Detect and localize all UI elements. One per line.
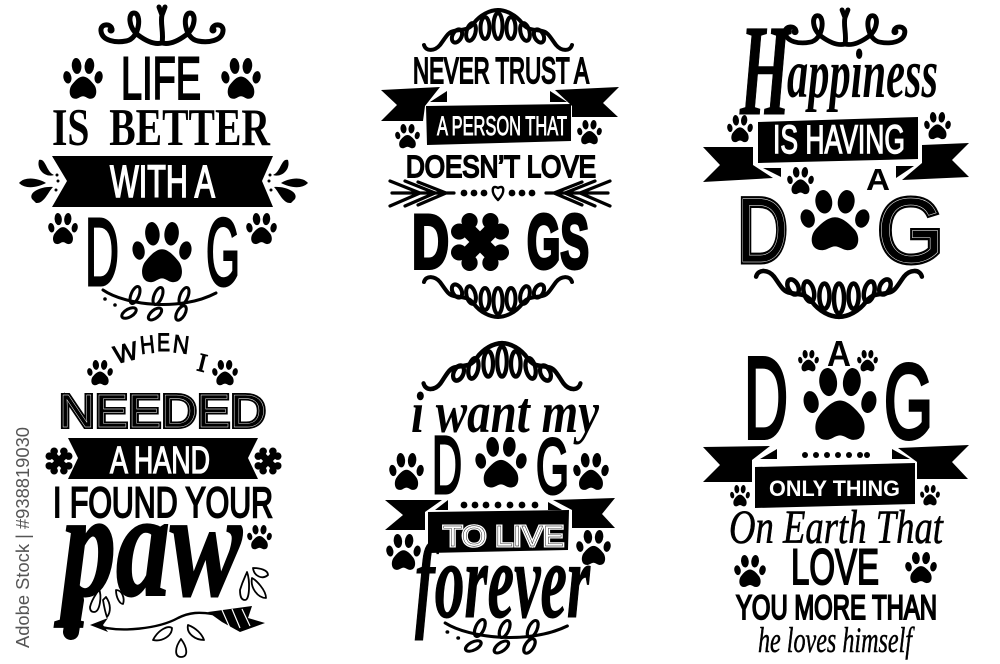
icon: paw left [395, 124, 420, 148]
ornament: bottom flourish [424, 277, 572, 317]
ribbon: left fold [435, 500, 448, 510]
icon: paw lower right [904, 552, 938, 583]
banner: with a [52, 156, 273, 207]
icon: paw left [388, 453, 425, 490]
panel: when i needed a hand [46, 329, 282, 657]
text: D: D [737, 180, 788, 282]
text: TO LIVE: TO LIVE [443, 521, 564, 553]
ribbon: left tail [703, 147, 773, 182]
text: I FOUND YOUR: I FOUND YOUR [53, 479, 273, 527]
banner: a hand [68, 438, 258, 479]
text: IS HAVING: IS HAVING [773, 118, 905, 162]
text: WHEN I [111, 329, 210, 378]
ribbon: left tail [385, 500, 442, 530]
text: G: G [536, 422, 569, 510]
ornament: twig [103, 285, 216, 322]
icon: paw left [62, 58, 104, 99]
text: A PERSON THAT: A PERSON THAT [437, 111, 567, 141]
ribbon: left fold [760, 449, 777, 459]
text: G: G [877, 180, 944, 282]
text: DOESN'T LOVE: DOESN’T LOVE [406, 149, 596, 184]
ornament: bottom flourish [756, 271, 922, 317]
text: A HAND: A HAND [110, 440, 210, 482]
panel: life is better with a dog [19, 7, 308, 322]
arrow: left [390, 181, 454, 206]
icon: paw left [87, 360, 113, 385]
text: G: G [884, 343, 933, 461]
text: TO LIVE: TO LIVE [443, 521, 564, 553]
ribbon: main [755, 463, 915, 508]
ribbon: right tail [555, 87, 619, 117]
ribbon: main [758, 117, 918, 163]
label: adobe stock id: Adobe Stock | #938819030 [13, 427, 33, 648]
text: he loves himself: he loves himself [758, 620, 915, 660]
icon: paw lower left [385, 534, 422, 570]
heading: LIFE: LIFE [121, 45, 201, 112]
text: WHEN I: N [171, 330, 191, 360]
icon: central paw [474, 436, 528, 487]
text: WHEN I: I [195, 348, 210, 378]
heading: paw: paw [54, 462, 243, 628]
ribbon: left fold [763, 168, 781, 177]
ribbon: left fold [430, 91, 447, 102]
text: WITH A: WITH A [110, 156, 215, 207]
text: D: D [412, 200, 449, 285]
ribbon: main [428, 510, 569, 553]
icon: paw right [857, 350, 878, 371]
icon: bone clover right [254, 448, 282, 474]
ornament: top flourish [424, 343, 580, 389]
panel: never trust a person [381, 10, 619, 317]
ornament: paw stem extension [71, 600, 76, 632]
icon: small paw [247, 525, 272, 549]
heading: forever: forever [415, 522, 591, 641]
text: D: D [737, 180, 788, 282]
text: ONLY THING: ONLY THING [769, 476, 900, 501]
arrow: right [546, 181, 610, 206]
divider: dots and heart [461, 187, 535, 200]
ribbon: right fold [548, 502, 562, 510]
ribbon: right fold [892, 449, 910, 459]
divider: dots [461, 502, 538, 508]
ribbon: right tail [553, 498, 615, 528]
ribbon: right fold [550, 91, 567, 102]
text: D: D [744, 333, 788, 463]
icon: paw left [730, 485, 750, 506]
icon: bone clover left [46, 448, 72, 474]
panel: happiness is having a dog [703, 0, 969, 317]
ribbon: right tail [902, 143, 969, 180]
ribbon: right tail [898, 445, 969, 479]
heading: NEVER TRUST A: NEVER TRUST A [413, 50, 589, 91]
heading: H: H [740, 0, 792, 143]
ornament: top flourish [424, 10, 572, 50]
ribbon: right fold [896, 166, 914, 178]
text: WHEN I: H [139, 329, 156, 359]
heading: NEEDED: NEEDED [59, 385, 266, 437]
text: GS: GS [527, 200, 589, 285]
panel: i want my dog to live forever [385, 343, 615, 655]
icon: paw left [727, 115, 753, 142]
icon: small paw right [245, 213, 278, 244]
icon: paw right [220, 58, 262, 99]
divider: dots [802, 452, 870, 458]
text: LOVE: LOVE [791, 539, 879, 595]
text: A: A [866, 162, 890, 197]
ornament: drops left [90, 589, 124, 617]
ornament: twig [445, 618, 567, 655]
text: WHEN I: E [157, 329, 170, 357]
text: WHEN I: W [111, 337, 141, 370]
ribbon: left tail [381, 87, 440, 121]
icon: paw right [212, 360, 238, 385]
icon: paw left [798, 350, 819, 371]
text: IS BETTER: IS BETTER [52, 99, 271, 157]
icon: central paw [131, 221, 193, 282]
text: D: D [432, 420, 462, 511]
ribbon: main [426, 104, 571, 145]
icon: paw right [572, 453, 610, 490]
ornament: drops right [240, 568, 268, 600]
icon: central paw [799, 189, 871, 250]
heading: NEEDED: NEEDED [59, 385, 266, 437]
icon: paw lower right [575, 530, 612, 565]
ornament: drops bottom [153, 625, 204, 657]
panel: life is better with a dog: D [85, 199, 119, 306]
icon: central paw [802, 367, 878, 440]
text: G: G [877, 180, 944, 282]
ornament: left leaves [19, 160, 60, 203]
ornament: top flourish [785, 10, 905, 45]
panel: life is better with a dog: G [206, 199, 240, 306]
icon: bone clover [451, 213, 509, 271]
icon: paw middle [786, 167, 815, 194]
ornament: top flourish [101, 7, 223, 44]
icon: small paw left [47, 213, 79, 244]
arrow: feathered [90, 606, 265, 632]
icon: paw right [923, 112, 952, 139]
panel: a dog only thing [703, 333, 969, 660]
ribbon: left tail [703, 446, 770, 482]
text: A: A [827, 333, 851, 374]
icon: paw right [920, 485, 940, 505]
icon: paw lower left [733, 555, 767, 587]
ornament: right leaves [268, 160, 308, 203]
heading: i want my: i want my [411, 380, 599, 445]
icon: paw right [577, 120, 602, 144]
